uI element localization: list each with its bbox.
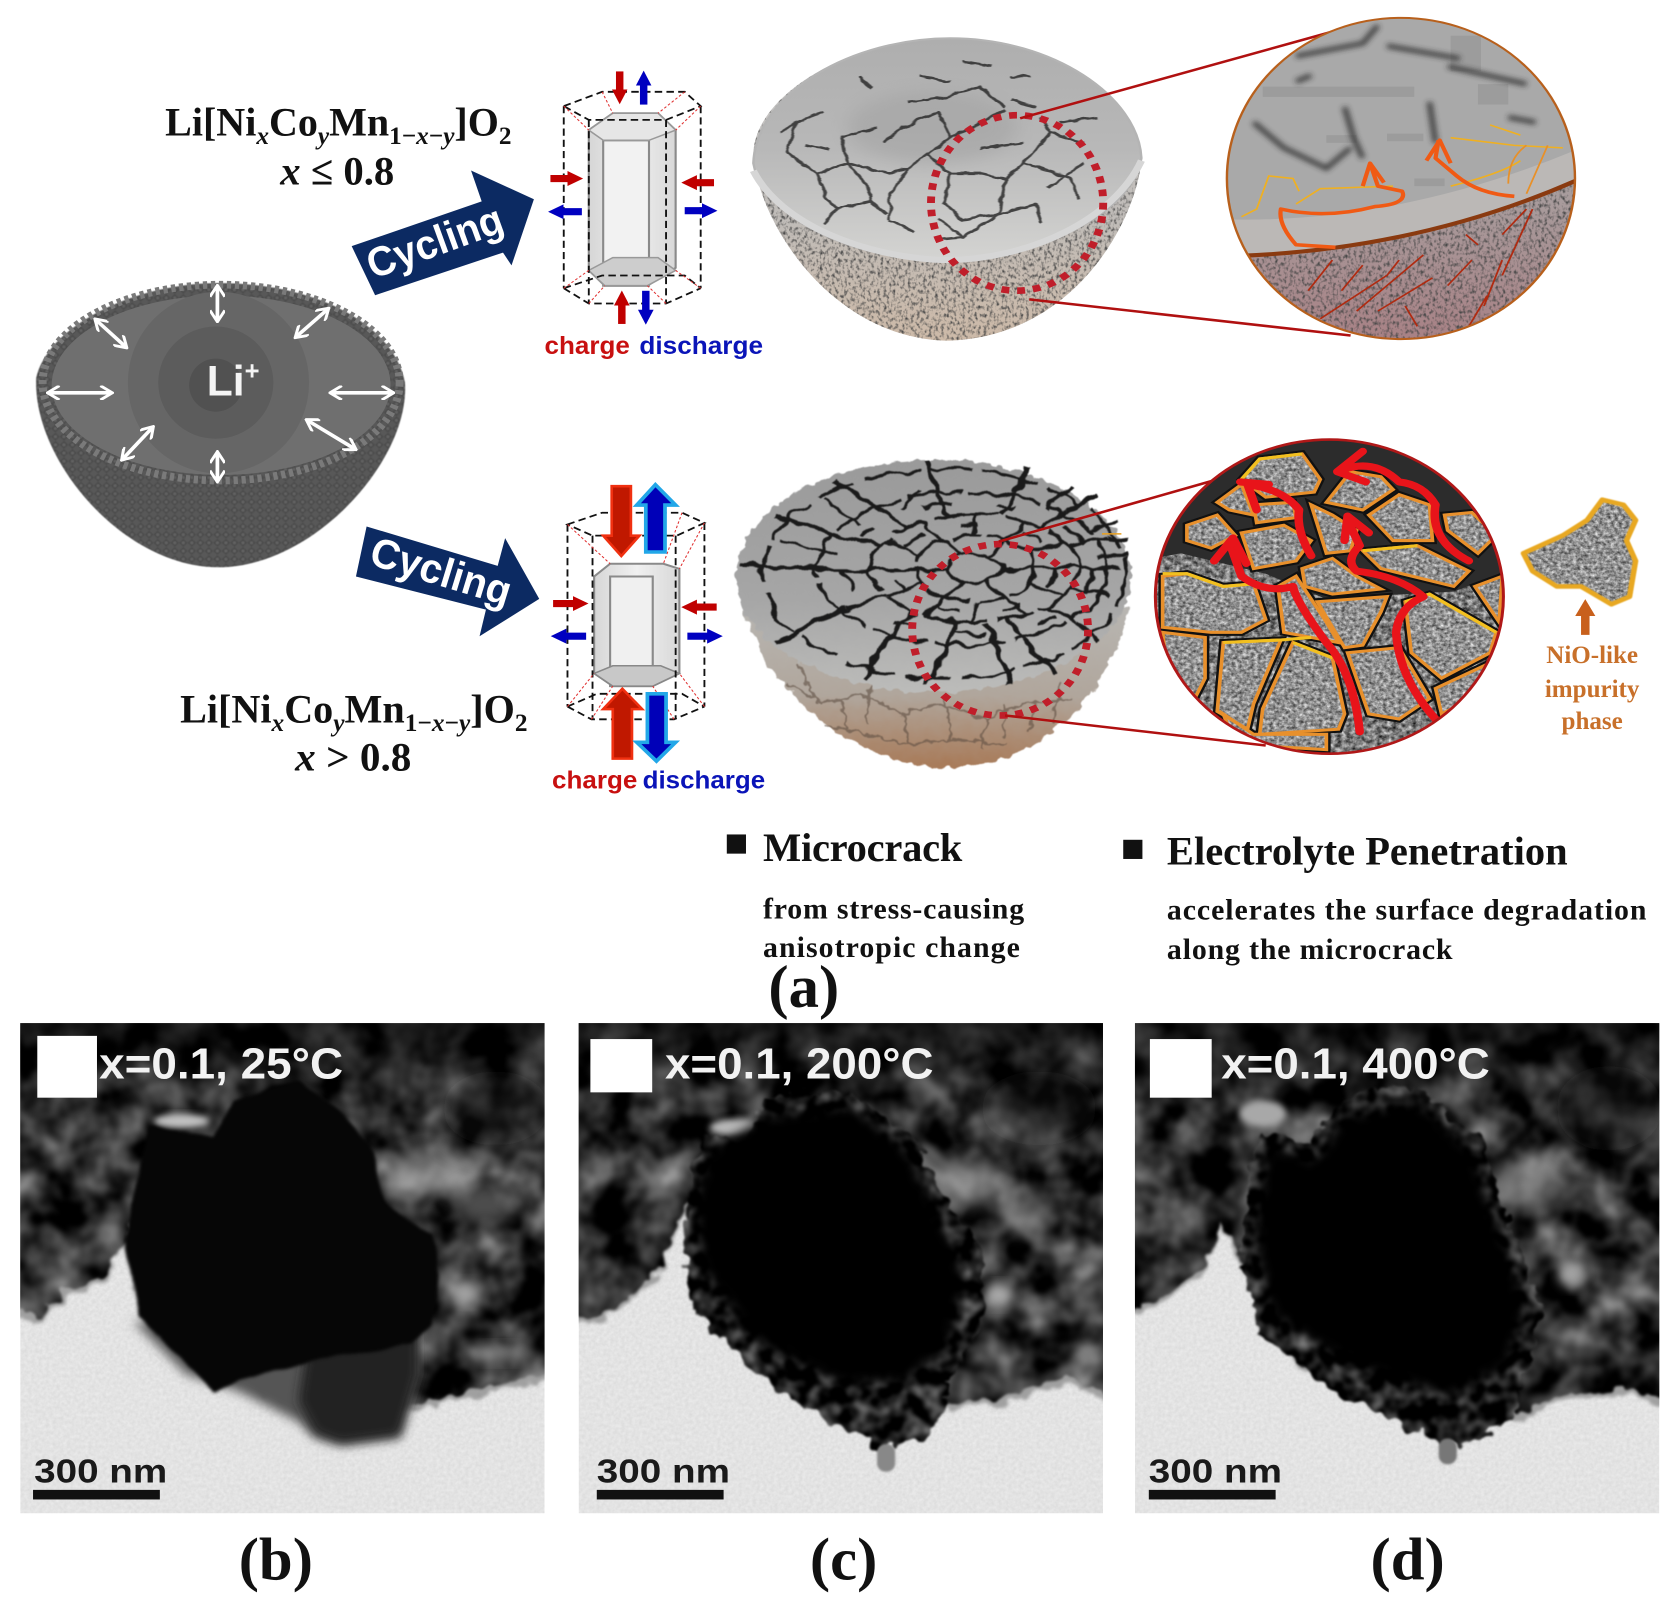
callout lines	[999, 474, 1266, 746]
label box	[37, 1036, 97, 1098]
icon: white expansion arrows	[49, 287, 392, 481]
caption c: x=0.1, 200°C	[665, 1040, 934, 1089]
particle c	[682, 1092, 983, 1472]
arrow: cycling top	[352, 171, 534, 295]
heading: bottom formula: ]O	[470, 687, 515, 732]
dotted circle	[912, 544, 1088, 715]
label: charge discharge bottom: charge	[552, 768, 637, 795]
arrow: cycling bottom	[356, 526, 539, 636]
label: charge discharge top: discharge	[639, 333, 763, 360]
label: NiO-like impurity phase: phase	[1562, 708, 1623, 735]
label: NiO-like impurity phase	[1545, 642, 1640, 735]
scale bar b	[33, 1459, 165, 1500]
heading: top formula: Li[Ni	[165, 99, 257, 144]
heading: top formula: x	[255, 121, 269, 150]
heading: top formula: Co	[269, 99, 318, 144]
scale bar c: 300 nm	[597, 1452, 730, 1489]
heading: top formula	[165, 99, 512, 193]
label box	[1150, 1039, 1212, 1098]
caption b: x=0.1, 25°C	[99, 1040, 343, 1089]
panel: top magnified circle	[1223, 15, 1581, 347]
callout lines	[1020, 32, 1351, 336]
label: charge discharge top	[545, 333, 763, 360]
panel: TEM image c	[578, 1023, 1103, 1514]
heading: top formula: Mn	[329, 99, 389, 144]
text block: electrolyte penetration: accelerates the surface degradation	[1167, 894, 1647, 927]
panel: bottom magnified circle	[1154, 436, 1508, 757]
heading: bottom formula: Li[Ni	[180, 687, 272, 732]
heading: bottom formula: Co	[284, 687, 333, 732]
label: charge discharge bottom: discharge	[643, 768, 765, 795]
label: charge discharge top: charge	[545, 333, 630, 360]
icon: NiO-like impurity particle	[1523, 500, 1636, 635]
crystal: top hexagonal prism with small strain arrows	[550, 71, 714, 324]
label: (a): (a)	[768, 954, 839, 1021]
label: charge discharge bottom	[552, 768, 765, 795]
label: (b): (b)	[239, 1526, 313, 1593]
Li+ label: Li	[207, 357, 245, 405]
heading: top formula: x ≤ 0.8	[279, 148, 394, 193]
heading: top formula: 2	[499, 121, 512, 150]
arrow: cycling top: Cycling	[360, 195, 509, 288]
particle b	[125, 1081, 439, 1445]
text block: microcrack	[727, 825, 1024, 964]
heading: bottom formula: x	[271, 708, 284, 737]
heading: bottom formula: 1−x−y	[405, 708, 470, 737]
label: (d): (d)	[1370, 1526, 1445, 1593]
heading: top formula: 1−x−y	[389, 121, 455, 150]
panel: bottom cracked bowl with dotted region	[736, 460, 1266, 767]
panel: top cracked bowl with dotted region	[753, 32, 1351, 341]
text block: microcrack: Microcrack	[763, 825, 963, 870]
panel: TEM image d	[1114, 1002, 1671, 1513]
heading: bottom formula: y	[330, 708, 345, 737]
text block: electrolyte penetration	[1123, 828, 1647, 966]
label: (c): (c)	[810, 1526, 877, 1593]
dotted circle	[931, 115, 1103, 291]
panel: TEM image b	[20, 1023, 545, 1514]
surface cracks	[741, 462, 1126, 686]
panel: pristine hemisphere particle with Li+ arrows	[36, 283, 405, 567]
particle d	[1242, 1087, 1540, 1464]
heading: bottom formula: x > 0.8	[294, 735, 411, 780]
text block: electrolyte penetration: Electrolyte Penetration	[1167, 828, 1568, 873]
label box	[590, 1039, 652, 1092]
heading: bottom formula	[180, 687, 528, 780]
text block: electrolyte penetration: along the microcrack	[1167, 933, 1453, 966]
heading: top formula: ]O	[454, 99, 499, 144]
scale bar d: 300 nm	[1149, 1452, 1282, 1489]
arrow: cycling bottom: Cycling	[365, 527, 517, 615]
heading: top formula: y	[315, 121, 330, 150]
heading: bottom formula: 2	[515, 708, 528, 737]
scale bar b: 300 nm	[34, 1452, 167, 1489]
scale bar d	[1148, 1459, 1280, 1500]
label: NiO-like impurity phase: NiO-like	[1546, 642, 1638, 669]
scale bar c	[596, 1459, 728, 1500]
heading: bottom formula: Mn	[345, 687, 405, 732]
text block: microcrack: from stress-causing	[763, 893, 1024, 926]
cracks	[781, 61, 1096, 240]
caption d: x=0.1, 400°C	[1221, 1040, 1490, 1089]
crystal: bottom hexagonal prism with large strain arrows	[553, 485, 717, 761]
text block: microcrack: anisotropic change	[763, 931, 1020, 964]
Li+ label: +	[245, 357, 260, 385]
label: NiO-like impurity phase: impurity	[1545, 676, 1640, 703]
